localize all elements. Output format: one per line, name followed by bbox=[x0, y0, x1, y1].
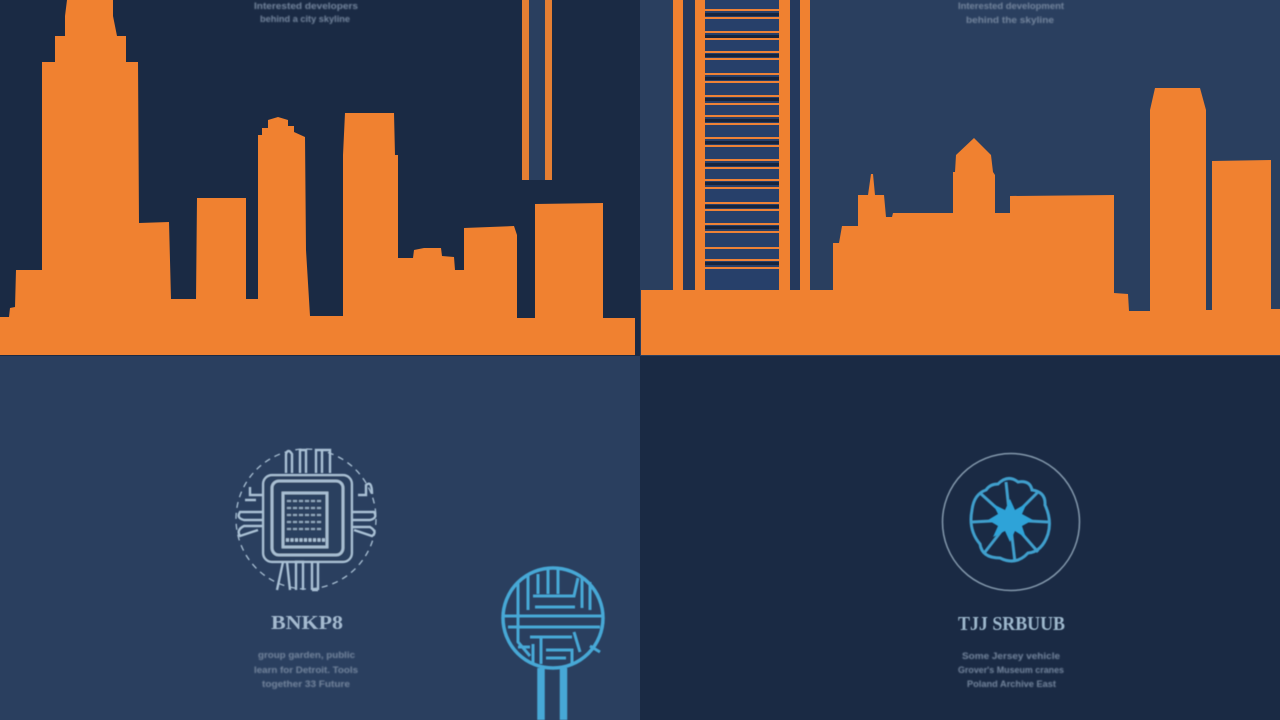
panel: top-right skyline bbox=[640, 0, 1280, 356]
caption: top-right: Interested development bbox=[958, 1, 1064, 11]
heading: wheel: TJJ SRBUUB bbox=[958, 613, 1065, 635]
caption: top-left: behind a city skyline bbox=[260, 14, 350, 24]
caption: top-right: behind the skyline bbox=[966, 15, 1054, 25]
striped tower bbox=[673, 0, 810, 292]
caption: chip: group garden, public bbox=[258, 650, 355, 660]
panel: top-left skyline bbox=[0, 0, 640, 356]
caption: top-left: Interested developers bbox=[254, 1, 358, 11]
caption: wheel: Poland Archive East bbox=[967, 679, 1056, 689]
icon: microchip in dashed circle bbox=[236, 449, 376, 590]
caption: top-left bbox=[254, 1, 358, 24]
caption: wheel: Some Jersey vehicle bbox=[962, 651, 1060, 661]
icon: circuit tree bbox=[503, 568, 603, 720]
caption: chip: together 33 Future bbox=[262, 679, 350, 689]
heading: chip: BNKP8 bbox=[271, 612, 343, 634]
caption: wheel bbox=[958, 651, 1064, 689]
orange city skyline right bbox=[641, 88, 1280, 355]
panel: bottom-right wheel bbox=[640, 356, 1280, 720]
antenna towers bbox=[522, 0, 552, 180]
caption: top-right bbox=[958, 1, 1064, 25]
chip pins bbox=[239, 450, 375, 590]
orange city skyline left bbox=[0, 0, 635, 355]
caption: wheel: Grover's Museum cranes bbox=[958, 665, 1064, 675]
icon: radial burst in circle bbox=[942, 454, 1080, 590]
panel: bottom-left chip bbox=[0, 356, 640, 720]
caption: chip: learn for Detroit. Tools bbox=[254, 665, 358, 675]
caption: chip bbox=[254, 650, 358, 689]
